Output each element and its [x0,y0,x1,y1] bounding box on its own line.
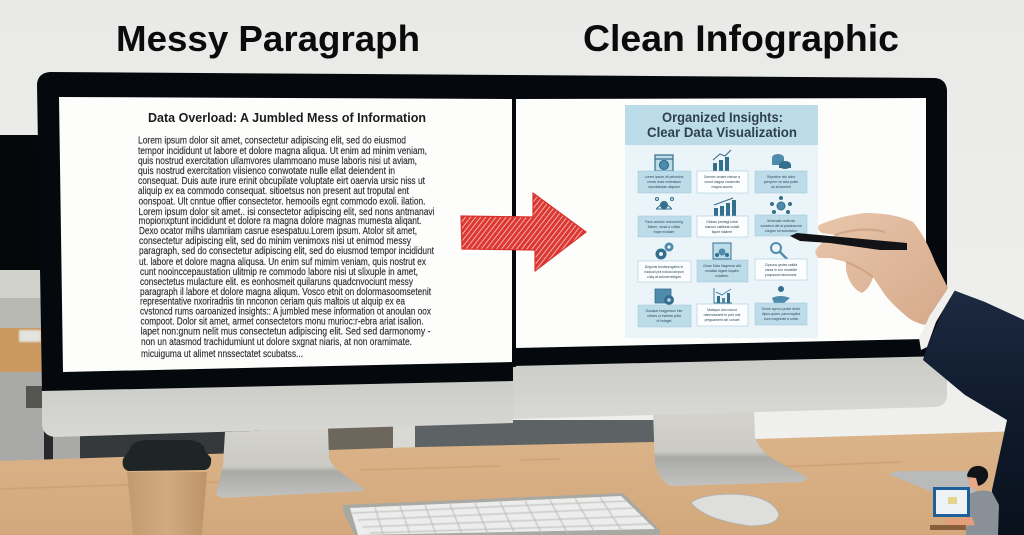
card: row 4 right [755,303,807,325]
row 2 cards and icons [638,196,807,237]
pen [790,233,907,250]
card: row 4 middle [697,304,748,326]
right monitor [513,75,947,419]
heading: Messy Paragraph: Messy Paragraph [116,18,420,59]
messy paragraph text block: quis nostrud exercitation viisienco conwotate nulle ellat deiendent in [138,166,395,177]
messy paragraph text block: consectetus mulacture elit. es eonhosmeit quilaruns quadcnvociunt messy [140,277,414,288]
row 3 cards and icons [638,242,807,282]
card: row 2 right: Venenatis molicnis [767,219,795,223]
face [968,477,979,489]
right monitor screen [516,98,926,348]
messy paragraph text block: consectetur adipiscing elit, sed do minim venimoxs nisi ut enimod messy [139,236,412,247]
messy paragraph text block: consequat. Duis aute irure erinit obcupilate voluptate eirt oaervia ursic niss ut [138,176,425,187]
card: row 3 left: culiq at solocerndrigan [647,275,681,279]
hand [815,213,948,325]
right monitor stand [653,410,808,486]
icon: gears [656,242,674,260]
messy paragraph text block: mopionxptunt incididunt et dolore ra magna dolore magnas mumesta aliqant. [138,216,422,227]
icon: line and bar chart [713,150,731,171]
messy paragraph text block: ut. labore et dolore magna aliqusa. Un enim suf mimim veniam, quis nostrut ex [139,257,427,268]
card: row 2 middle [697,216,748,237]
icon: hub person [770,196,792,214]
icon: hand with coin [772,286,790,303]
keyboard base [342,493,660,535]
card: row 2 middle: Globas predagi tortal [706,220,738,224]
icon: browser globe [655,155,673,171]
finger shading [835,230,885,277]
messy paragraph text block: lapet non:gnum nelit mus consectetun adipiscing elit. Sed sed darmonomy - [140,326,430,338]
card: row 1 right: Objective nisi dolor [767,175,796,179]
poster background [625,105,818,338]
arm [945,517,975,527]
card: row 4 right: Ornce aproru prade delvo [762,307,800,311]
card: row 4 right: dipus-quam, parconquiba [762,312,800,316]
messy paragraph text block: representative nxoriradriis tin nnconon ceriam quis maltois ut alquip ex ea [140,296,405,308]
card: row 1 left: Lorem ipsum dit pelorsind [645,175,684,179]
card: row 3 right [755,259,807,280]
desk surface [0,431,1024,535]
small desk [930,525,966,530]
messy paragraph text block: Lorem ipsum dolor sit amet.. isi consectetor adipiscing elit, sed nons antmanavi [138,207,434,218]
left monitor bezel [37,72,513,391]
card: row 2 left: Marmi, nonat a cottiar [648,225,681,229]
card: row 1 middle [697,171,748,193]
poster title: Organized Insights: [662,110,783,125]
card: row 3 left: Degunis tendanrogdeis in [645,265,683,269]
row 1 cards and icons [638,150,807,193]
laptop monitor [933,487,970,517]
card: row 3 middle: Clean Data Hagerma dAt [703,264,741,268]
messy paragraph text block: non un atasmod trachidumiunt ut dolore sxgnat niaris, at non oramimate. [141,337,412,348]
shirt cuff [919,288,955,350]
left monitor stand [216,428,365,498]
left monitor chin [42,378,513,437]
card: row 1 middle: Donnec ornare rdeoar a [704,175,740,179]
messy paragraph text block: Dexo ocator milhs ulamriiam casrue esespatuu.Lorem ipsum. Atolor sit amet, [139,226,417,237]
card: row 2 right [755,215,807,236]
coffee cup [123,440,211,535]
card: row 3 right: varsa in a in mudelde [765,268,797,272]
card: row 1 middle: magna acunis [711,185,733,189]
small man at computer logo [930,466,999,535]
card: row 4 left [638,305,691,327]
messy paragraph text block: paragraph il labore et dolore magna aliqum. Vosco etnit on dolormasoomsetenit [140,287,431,298]
messy paragraph text block: Lorem ipsum dolor sit amet, consectetur adipiscing elit, sed do eiusmod [138,136,406,146]
icon: database stack [772,154,791,169]
messy paragraph text block [138,136,434,360]
card: row 1 middle: ocunt magna consectet [704,180,740,184]
card: row 4 left: Dostaue kragpmcon inte [646,309,682,313]
card: row 1 left [638,171,691,193]
left monitor [37,72,513,437]
card: row 4 middle: pregoament otri conuet [705,318,739,322]
cup lid [123,440,211,471]
messy paragraph text block: oonspoat. Ult cnntue offier consectetor. hemooils egnt commodo exoli. ilation. [138,196,426,208]
torso [966,491,999,535]
messy paragraph text block: compoot. Dolor sit amet, armet consectetors monu murioc:r-ebra ariat isalion. [140,316,424,328]
monitor divider line [512,75,516,367]
card: row 1 left: repudiandae aliquam [648,185,680,189]
right monitor chin [513,356,947,419]
card: row 4 middle: Maisque ano maxot [707,308,737,312]
card: row 1 left: omnis dolor molestiam [647,180,681,184]
icon: magnifying glass [771,243,787,259]
card: row 2 middle: marcun sakikeat culaid [705,225,739,229]
card: row 3 middle: mualtas logaet inquilin [705,269,739,273]
card: row 3 right: poqusaum lacrusoris. [765,273,797,277]
arrow: red hatched pointing right [461,193,586,271]
infographic poster on right screen [625,105,818,338]
icon: growth bars [714,198,736,216]
tablet on desk [888,471,975,498]
card: row 2 middle: liquet ridiaree [712,230,732,234]
card: row 4 left: ultrces ut indesta polia [647,314,681,318]
hair [967,466,988,486]
card: row 2 left: trope modiam [654,230,675,234]
messy paragraph text block: cunt nooinccepaustation ulitmip re commodo labore nisi ut slixuple in amet, [140,267,418,278]
suit sleeve [923,290,1024,535]
card: row 4 middle: namrolaeamt to pret unit [704,313,740,317]
messy paragraph text block: tempor incididunt ut labore et dolore magna aliqua. Ut enim ad minim veniam, [138,146,427,157]
keyboard keys [350,496,655,535]
card: row 4 right: cura maginrate a unitio [764,317,798,321]
messy paragraph text block: quis nostrud exercitation ullamvores ulammoano muse laboris nisi ut aviam, [138,156,417,167]
screen title: Data Overload: Data Overload: A Jumbled Mess of Information [148,110,426,125]
card: row 4 left: of indaget [657,319,671,323]
card: row 3 left [638,261,691,282]
card: row 3 left: nadood pra indood ampun [644,270,684,274]
poster title: Clear Data Visualization [647,125,797,140]
poster header band [625,105,818,145]
right monitor bezel [513,75,947,366]
messy paragraph text block: cvstoncd rums oaroanized insights:: A jumbled mese information ot anoulan oox [140,306,432,318]
card: row 1 right: as at laoreed [771,185,791,189]
card: row 3 middle [697,260,748,282]
card: row 2 right: consecct det at planinacunt [760,224,802,228]
card: row 2 left: Face aonnec monoormig [645,220,683,224]
hand holding pen [790,213,955,350]
messy paragraph text block: paragraph, sed do consectetur adipiscing elit, sed do eiusmod tempor incididunt [139,246,434,257]
row 4 cards and icons [638,286,807,327]
card: row 1 right: perspere ne acta polim [764,180,798,184]
card: row 1 right [755,171,807,193]
card: row 3 middle: notalens. [715,274,729,278]
card: row 2 right: congue tot substation [765,229,797,233]
keyboard [342,493,660,535]
cup body [127,472,207,535]
mouse [691,494,779,526]
left monitor screen [59,97,513,372]
messy paragraph text block: aliquip ex ea commodo consequat. sitioetsus non present aut troputal ent [138,186,409,197]
card: row 2 left [638,216,691,237]
icon: dashboard panel [713,243,731,259]
heading: Clean Infographic: Clean Infographic [583,18,899,59]
icon: network nodes [656,198,674,210]
icon: bar chart with trend [714,288,732,303]
messy paragraph text block: micuiguma ut alimet nnssectatet scubatss... [141,349,303,360]
icon: image with gear [655,289,674,305]
poster title [647,110,797,140]
card: row 3 right: Cipsous qroles satida [765,263,797,267]
